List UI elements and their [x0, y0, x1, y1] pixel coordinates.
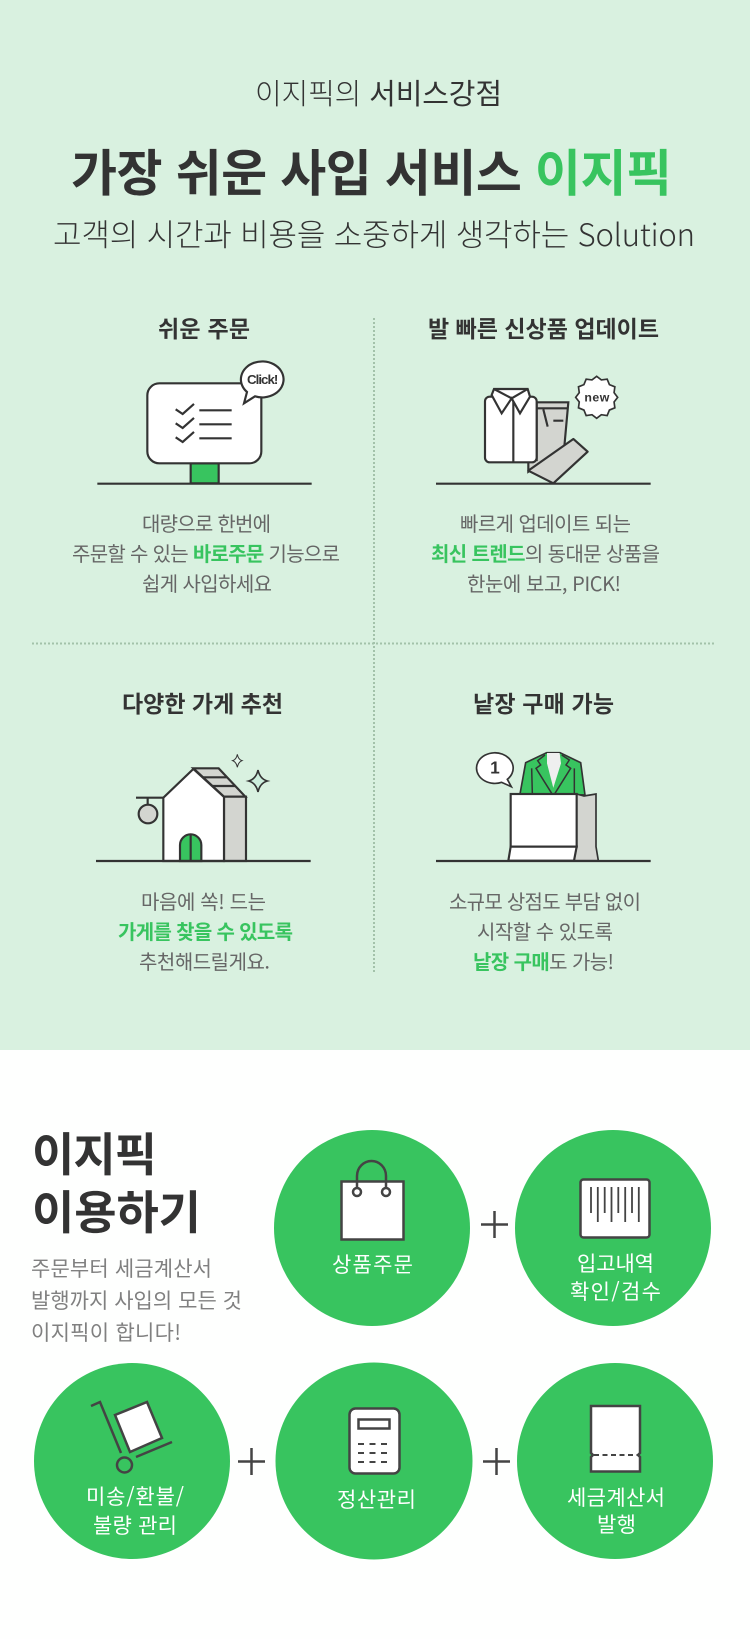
icon: shop with sparkles — [96, 754, 311, 861]
icon: shirt and trousers with new badge: new — [584, 390, 610, 404]
panel: service strengths — [0, 0, 750, 1050]
icon: jacket in shopping bag — [436, 753, 651, 861]
title: 가장 쉬운 사입 서비스 이지픽 — [71, 134, 672, 206]
feature: fast new product updates — [428, 310, 660, 597]
description: 추천해드릴게요. — [139, 946, 270, 975]
plus — [481, 1211, 508, 1238]
plus — [483, 1448, 510, 1475]
section description: 이지픽이 합니다! — [31, 1317, 181, 1347]
description: 한눈에 보고, PICK! — [467, 568, 621, 597]
label: 입고내역 — [577, 1248, 654, 1278]
section description: 발행까지 사입의 모든 것 — [31, 1285, 242, 1315]
label: 확인/검수 — [570, 1276, 661, 1306]
label: 불량 관리 — [93, 1510, 177, 1540]
feature: single item purchase — [436, 685, 651, 975]
feature: store recommendations — [96, 685, 311, 975]
icon: jacket in shopping bag: 1 — [490, 757, 500, 777]
heading: 다양한 가게 추천 — [122, 685, 283, 719]
section heading: 이용하기 — [32, 1177, 201, 1243]
heading: 낱장 구매 가능 — [473, 685, 614, 719]
step: returns management — [34, 1363, 230, 1559]
heading: 발 빠른 신상품 업데이트 — [428, 310, 659, 344]
description: 가게를 찾을 수 있도록 — [118, 916, 293, 945]
icon: barcode — [580, 1180, 650, 1238]
step: settlement — [276, 1362, 472, 1560]
description: 빠르게 업데이트 되는 — [460, 508, 631, 537]
description: 주문할 수 있는 바로주문 기능으로 — [72, 538, 340, 567]
description: 낱장 구매도 가능! — [473, 946, 614, 975]
icon: shopping bag — [342, 1161, 404, 1240]
feature: easy order — [72, 310, 340, 597]
description: 마음에 쏙! 드는 — [141, 886, 266, 915]
description: 시작할 수 있도록 — [477, 916, 613, 945]
icon: sign board with checklist — [97, 361, 312, 484]
icon: invoice — [591, 1406, 640, 1472]
step: tax invoice — [517, 1363, 713, 1559]
label: 상품주문 — [332, 1249, 413, 1279]
description: 최신 트렌드의 동대문 상품을 — [431, 538, 660, 567]
subtitle: 고객의 시간과 비용을 소중하게 생각하는 Solution — [53, 210, 695, 255]
label: 세금계산서 — [567, 1482, 665, 1512]
icon: hand truck — [91, 1402, 172, 1472]
label: 정산관리 — [337, 1484, 416, 1514]
plus — [238, 1448, 265, 1475]
heading: 쉬운 주문 — [158, 310, 250, 344]
icon: shirt and trousers with new badge — [436, 376, 651, 484]
label: 발행 — [597, 1509, 636, 1539]
description: 대량으로 한번에 — [142, 508, 271, 537]
description: 쉽게 사입하세요 — [142, 568, 272, 597]
eyebrow heading: 이지픽의 서비스강점 — [255, 71, 502, 113]
section heading: 이지픽 — [32, 1119, 157, 1185]
step: product order — [274, 1130, 470, 1326]
icon: calculator — [350, 1408, 400, 1474]
step: receipt check — [515, 1130, 711, 1326]
panel: how to use — [31, 1119, 713, 1560]
description: 소규모 상점도 부담 없이 — [449, 886, 641, 915]
section description: 주문부터 세금계산서 — [31, 1253, 212, 1283]
icon: sign board with checklist: Click! — [247, 372, 278, 387]
label: 미송/환불/ — [86, 1481, 184, 1511]
